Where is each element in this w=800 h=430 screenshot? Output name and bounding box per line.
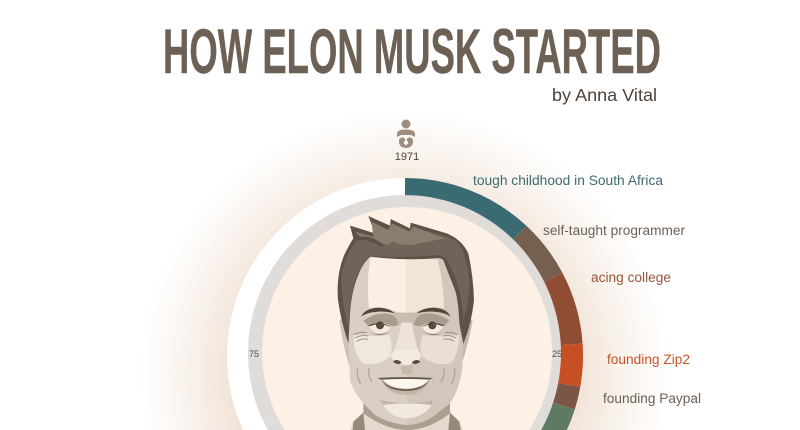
head base — [349, 253, 465, 425]
lower face right shade — [407, 257, 465, 425]
wrinkles — [353, 332, 457, 341]
ring label 25: 25 — [552, 349, 562, 359]
cheek highlights — [353, 335, 392, 364]
byline: by Anna Vital — [552, 85, 657, 105]
ring label 75: 75 — [249, 349, 259, 359]
hair mid tone — [342, 227, 469, 328]
forehead highlights — [368, 257, 407, 315]
eyes — [363, 314, 449, 335]
label: founding Zip2: founding Zip2 — [607, 352, 690, 367]
label: self-taught programmer: self-taught programmer — [543, 223, 686, 238]
ears — [339, 317, 351, 365]
chin — [380, 400, 433, 405]
nose — [393, 323, 419, 352]
icon: baby — [397, 120, 415, 148]
neck and collar — [350, 400, 463, 430]
label: acing college: acing college — [591, 270, 671, 285]
mouth — [382, 380, 429, 395]
hair highlight — [355, 222, 445, 245]
birth year label: 1971 — [395, 151, 419, 163]
label: tough childhood: tough childhood in South Africa — [473, 173, 663, 188]
eyebrows — [361, 308, 395, 317]
nose bridge shadow — [389, 313, 424, 325]
timeline ring — [227, 178, 583, 430]
label: founding Paypal: founding Paypal — [603, 391, 701, 406]
hair — [338, 216, 474, 344]
portrait of Elon Musk — [338, 216, 474, 430]
